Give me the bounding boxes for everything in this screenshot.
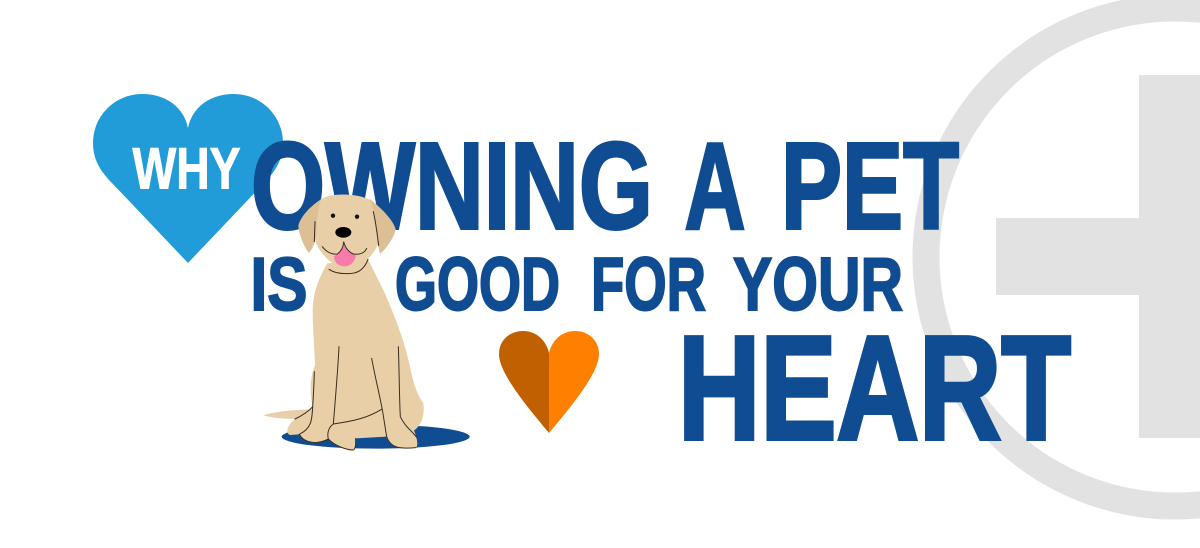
dog shadow <box>282 425 470 449</box>
dog tongue <box>334 244 356 266</box>
title line: IS GOOD FOR YOUR: FOR <box>591 242 706 326</box>
title line: HEART: HEART <box>678 306 1071 471</box>
title line: IS GOOD FOR YOUR: GOOD <box>395 242 560 326</box>
dog body <box>287 260 424 450</box>
dog head <box>315 194 379 269</box>
dog right ear <box>369 199 396 254</box>
dog eyes <box>331 213 359 219</box>
title line: OWNING A PET: PET <box>781 118 959 256</box>
title line: OWNING A PET: A <box>684 118 746 256</box>
title line: OWNING A PET: OWNING <box>251 118 653 256</box>
title line: IS GOOD FOR YOUR <box>250 242 903 326</box>
dog nose <box>335 227 351 238</box>
dog line work <box>295 212 417 450</box>
title line: IS GOOD FOR YOUR: YOUR <box>733 242 903 326</box>
dog left ear <box>298 199 321 253</box>
title line: IS GOOD FOR YOUR: IS <box>250 242 308 326</box>
icon: blue heart <box>93 94 283 263</box>
heading word: WHY: WHY <box>132 136 240 202</box>
title <box>250 118 1071 471</box>
illustration: dog sitting on shadow <box>263 194 470 450</box>
icon: orange folded heart <box>499 331 599 433</box>
icon: medical plus in circle <box>926 8 1200 506</box>
dog tail <box>263 409 315 419</box>
